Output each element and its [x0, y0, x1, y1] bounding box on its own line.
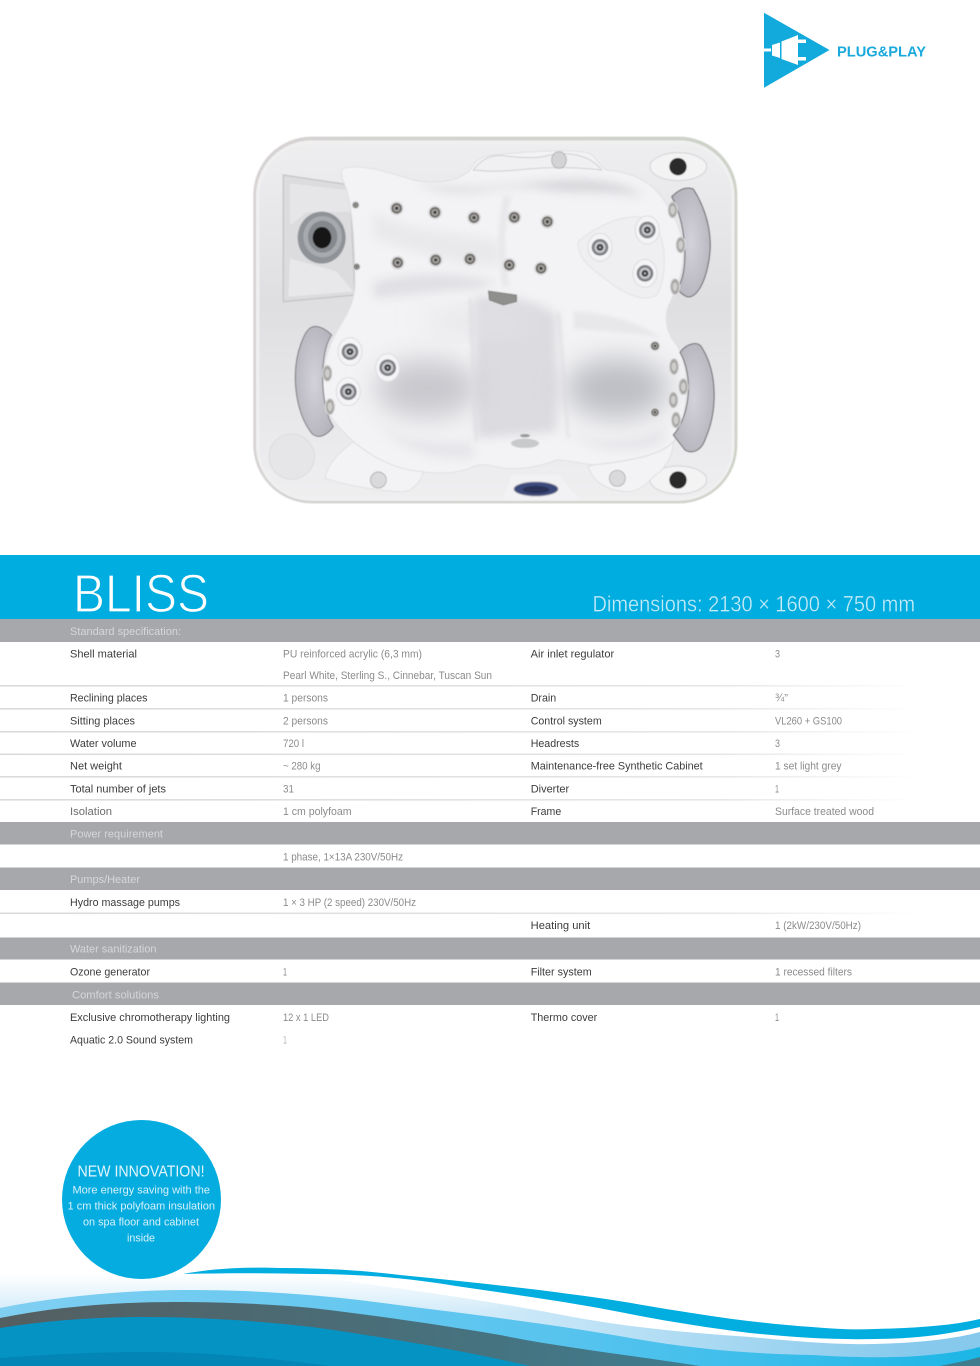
filter cylinder	[298, 212, 346, 264]
hot tub top view	[253, 137, 737, 503]
callout: new innovation: NEW INNOVATION!	[78, 1164, 204, 1181]
comfort solutions rows: 1	[775, 1012, 779, 1024]
specification table: standard: ¾”	[775, 692, 788, 704]
filter compartment	[283, 175, 355, 302]
specification table: standard: 3	[775, 648, 780, 660]
logo text: PLUG&PLAY	[837, 44, 926, 60]
specification table: standard: Diverter	[531, 784, 570, 796]
pumps and heater rows	[0, 897, 950, 932]
top handle and knob	[473, 152, 602, 171]
specification table: standard: Surface treated wood	[775, 806, 874, 818]
specification table: standard: Control system	[531, 716, 602, 728]
specification table: standard: Isolation	[70, 806, 112, 818]
pumps and heater rows: 1 × 3 HP (2 speed) 230V/50Hz	[283, 897, 416, 909]
specification table: standard: Headrests	[531, 738, 580, 750]
specification table: standard: Shell material	[70, 648, 137, 660]
comfort solutions rows: Thermo cover	[531, 1012, 598, 1024]
logo: plug and play	[764, 13, 926, 88]
specification table: standard: Frame	[531, 806, 561, 818]
water sanitization row: 1	[283, 966, 287, 978]
large seat jets	[336, 216, 664, 406]
pumps and heater rows: Hydro massage pumps	[70, 897, 180, 909]
footer waves	[0, 1268, 980, 1366]
specification table: standard: Pearl White, Sterling S., Cinnebar, Tuscan Sun	[283, 670, 492, 682]
pumps and heater rows: Heating unit	[531, 920, 590, 932]
title: BLISS: BLISS	[73, 564, 209, 624]
specification table: standard: Air inlet regulator	[531, 648, 615, 660]
headrests	[295, 188, 714, 452]
control panel	[503, 475, 580, 500]
callout: new innovation: 1 cm thick polyfoam insulation	[68, 1200, 215, 1212]
section bar: power requirement: Power requirement	[70, 828, 163, 840]
pumps and heater rows: 1 (2kW/230V/50Hz)	[775, 920, 861, 932]
specification table: standard: 2 persons	[283, 716, 328, 728]
comfort solutions rows: 1	[283, 1034, 287, 1046]
section bar: comfort solutions: Comfort solutions	[72, 990, 160, 1002]
swoosh	[183, 1268, 980, 1339]
section bar: pumps and heater	[0, 868, 980, 890]
section bar: water sanitization	[0, 938, 980, 960]
icon: play triangle with plug	[764, 13, 830, 88]
comfort solutions rows	[70, 1012, 779, 1046]
section bar: pumps and heater: Pumps/Heater	[70, 874, 140, 886]
power requirement row: 1 phase, 1×13A 230V/50Hz	[283, 852, 403, 864]
specification table: standard: 720 l	[283, 738, 304, 750]
side jets	[323, 202, 688, 428]
specification table: standard: Total number of jets	[70, 784, 166, 796]
specification table: standard: 1	[775, 784, 779, 796]
water sanitization row: 1 recessed filters	[775, 966, 852, 978]
section bar: standard specification: Standard specification:	[70, 626, 181, 638]
specification table: standard: 3	[775, 738, 780, 750]
section bar: power requirement	[0, 822, 980, 844]
drain	[511, 434, 539, 448]
specification table: standard: Net weight	[70, 760, 122, 772]
specification table: standard: 31	[283, 784, 294, 796]
specification table: standard: Water volume	[70, 738, 136, 750]
specification table: standard: Sitting places	[70, 716, 135, 728]
basin shading	[373, 180, 668, 459]
specification table: standard: Maintenance-free Synthetic Cabinet	[531, 760, 703, 772]
title band	[0, 555, 980, 624]
specification table: standard: 1 cm polyfoam	[283, 806, 352, 818]
specification table: standard: Reclining places	[70, 692, 148, 704]
comfort solutions rows: 12 x 1 LED	[283, 1012, 329, 1024]
specification table: standard: VL260 + GS100	[775, 716, 842, 728]
specification table: standard: Drain	[531, 692, 556, 704]
back wall jets	[352, 201, 660, 417]
callout: new innovation: inside	[127, 1233, 155, 1245]
water sanitization row: Filter system	[531, 966, 592, 978]
section bar: standard specification	[0, 619, 980, 642]
section bar: comfort solutions	[0, 982, 980, 1005]
specification table: standard: 1 set light grey	[775, 760, 842, 772]
comfort solutions rows: Exclusive chromotherapy lighting	[70, 1012, 230, 1024]
water sanitization row	[70, 966, 852, 978]
comfort solutions rows: Aquatic 2.0 Sound system	[70, 1034, 193, 1046]
specification table: standard: 1 persons	[283, 692, 328, 704]
cup holders and caps	[269, 153, 707, 494]
tub basin	[324, 170, 685, 456]
callout: new innovation: More energy saving with the	[72, 1184, 210, 1196]
tub rim and deck	[253, 137, 737, 503]
specification table: standard: PU reinforced acrylic (6,3 mm)	[283, 648, 422, 660]
specification table: standard: ~ 280 kg	[283, 760, 320, 772]
callout: new innovation: on spa floor and cabinet	[83, 1217, 199, 1229]
water sanitization row: Ozone generator	[70, 966, 150, 978]
section bar: water sanitization: Water sanitization	[70, 944, 156, 956]
specification table: standard	[0, 648, 950, 818]
dimensions: Dimensions: 2130 × 1600 × 750 mm	[592, 592, 915, 616]
bottom handles	[325, 442, 673, 492]
waterfall control	[488, 291, 517, 305]
callout: new innovation	[62, 1120, 221, 1279]
